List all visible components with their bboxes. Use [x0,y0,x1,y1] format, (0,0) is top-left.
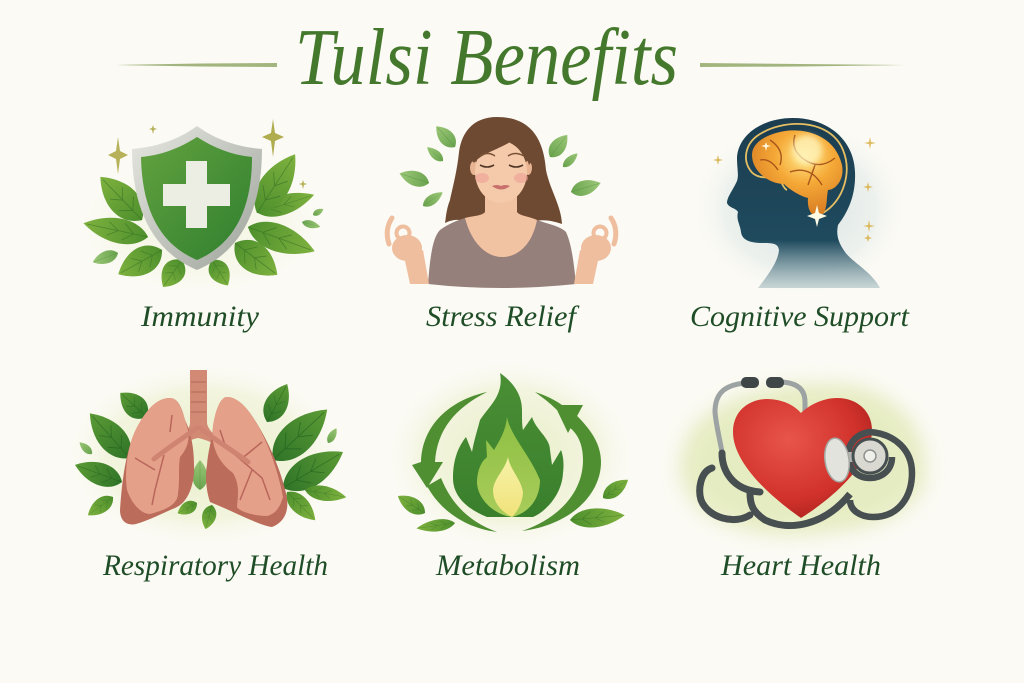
trachea [150,370,250,465]
body [428,218,576,288]
label: respiratory health: Respiratory Health [102,549,328,582]
icon: immunity shield with leaves [75,119,325,295]
icon: meditating woman with leaves [387,117,616,288]
heart [733,398,872,518]
ears and face [470,161,478,175]
stethoscope tubing [750,493,850,526]
dark tube left [700,453,760,520]
left arm and mudra hand [387,218,429,284]
icon: lungs with leaves [65,363,351,547]
chest piece [845,452,868,462]
trachea branches over lungs [154,428,248,462]
label: metabolism: Metabolism [435,549,580,582]
label: heart health: Heart Health [720,549,881,582]
icon: head with glowing brain [692,118,908,296]
left arrow [412,392,487,488]
label: stress relief: Stress Relief [426,300,580,333]
icon: flame with circular arrows [385,360,635,550]
stethoscope ear tubes [715,383,745,452]
hair [445,117,562,224]
title: Tulsi Benefits [295,14,678,102]
right arrow [535,392,583,433]
label: immunity: Immunity [140,300,260,333]
left lung [120,398,194,524]
label: cognitive support: Cognitive Support [690,300,910,333]
leaves [394,490,429,519]
flame [453,373,564,517]
neck and chest [465,195,537,257]
right arm and mudra hand [574,218,616,284]
right lung [206,397,287,527]
title [116,14,905,102]
icon: heart with stethoscope [680,377,926,535]
